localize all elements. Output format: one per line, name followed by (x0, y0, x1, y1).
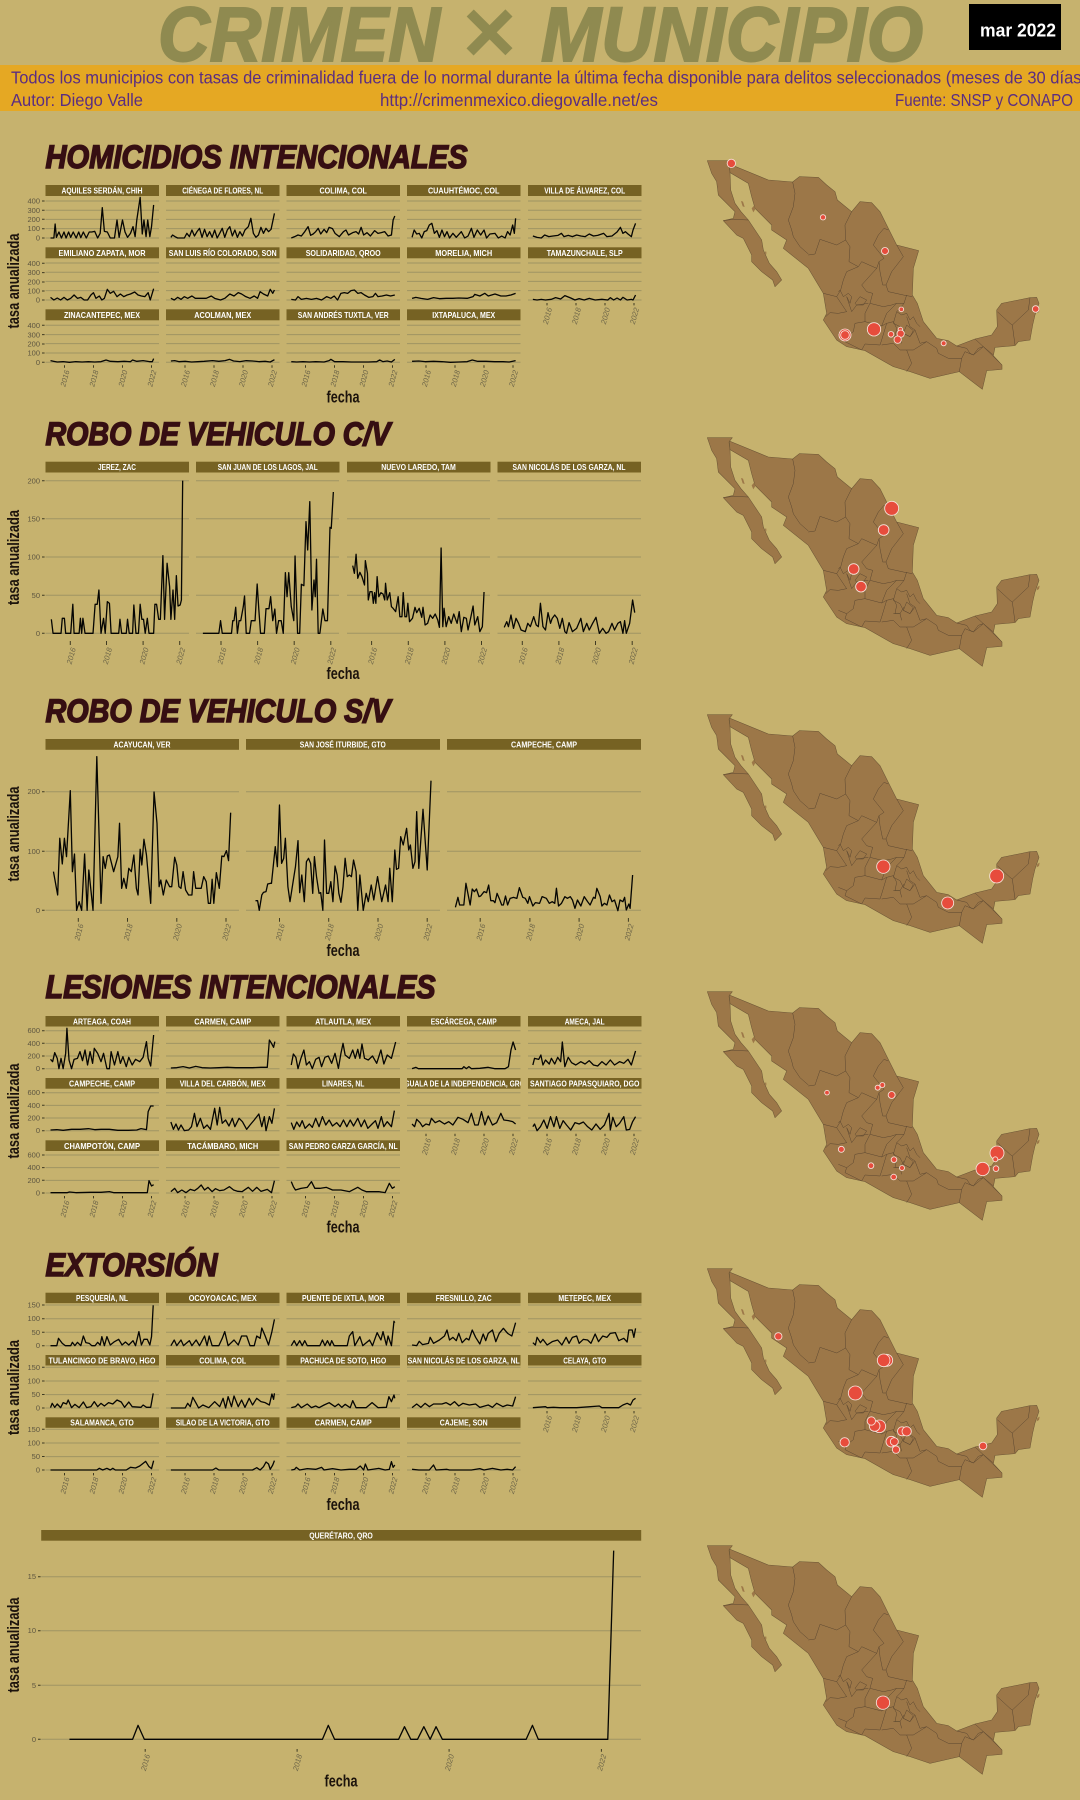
panel: San José Iturbide: SAN JOSÉ ITURBIDE, GTO (300, 739, 386, 749)
panel: San Andrés Tuxtla: 2022 (386, 368, 400, 389)
panel: San Andrés Tuxtla: 2020 (357, 368, 371, 389)
panel: Champotón: CHAMPOTÓN, CAMP (64, 1140, 140, 1151)
panel: Iguala de la Independencia (403, 1078, 525, 1157)
panel: Linares: LINARES, NL (322, 1080, 364, 1088)
y axis labels: 0 (32, 1735, 36, 1744)
panel: Iguala de la Independencia: 2022 (507, 1137, 520, 1157)
panel: Campeche: 2016 (474, 922, 488, 942)
panel: Silao de la Victoria (166, 1417, 280, 1496)
y axis labels: 200 (27, 1114, 40, 1122)
y axis labels: 50 (32, 591, 40, 600)
panel: Salamanca: 2022 (145, 1476, 159, 1496)
date badge (969, 4, 1061, 50)
heading: LESIONES INTENCIONALES (46, 969, 436, 1005)
panel: Iguala de la Independencia: 2016 (420, 1137, 433, 1157)
heading: ROBO DE VEHICULO C/V (46, 416, 393, 452)
panel: Santiago Papasquiaro: 2016 (541, 1137, 554, 1157)
panel: San Nicolás de los Garza (407, 1355, 520, 1408)
panel: Zinacantepec: 2020 (116, 368, 130, 389)
y axis labels: 400 (27, 1163, 40, 1172)
x axis: 2016 (139, 1753, 152, 1773)
panel: Silao de la Victoria: SILAO DE LA VICTORIA, GTO (176, 1419, 270, 1428)
panel: Celaya (528, 1355, 642, 1434)
panel: Champotón: 2022 (145, 1199, 159, 1219)
panel: Santiago Papasquiaro (528, 1078, 642, 1157)
panel: Fresnillo: FRESNILLO, ZAC (436, 1294, 492, 1303)
y axis labels: 600 (27, 1150, 40, 1160)
panel: Colima: COLIMA, COL (199, 1356, 246, 1365)
panel: Tacámbaro: 2022 (266, 1199, 279, 1219)
panel: Salamanca (46, 1417, 159, 1496)
y axis title: tasa anualizada (5, 1597, 23, 1692)
panel: Salamanca: 2018 (87, 1476, 101, 1496)
panel: Acayucan: ACAYUCAN, VER (114, 740, 171, 749)
y axis labels: 50 (32, 1390, 40, 1399)
panel: Morelia: MORELIA, MICH (435, 249, 492, 258)
panel: Santiago Papasquiaro: 2018 (570, 1137, 583, 1157)
y axis labels: 300 (27, 268, 40, 277)
y axis labels: 600 (27, 1088, 40, 1097)
panel: Acolman: 2022 (266, 368, 279, 389)
panel: Tamazunchale: 2022 (628, 306, 641, 326)
map: robo s/v (707, 715, 1040, 943)
y axis labels: 400 (27, 196, 40, 206)
panel: Celaya: 2018 (570, 1414, 583, 1434)
panel: San Luis Río Colorado: SAN LUIS RÍO COLORADO, SON (169, 248, 277, 258)
y axis labels (27, 787, 45, 915)
panel: San José Iturbide: 2020 (372, 922, 385, 942)
panel: Linares (286, 1078, 400, 1131)
panel: Celaya: CELAYA, GTO (563, 1356, 607, 1365)
panel: San Nicolás de los Garza: SAN NICOLÁS DE LOS GARZA, NL (512, 462, 626, 472)
panel: Tulancingo de Bravo (46, 1355, 159, 1408)
panel: Cajeme: 2020 (478, 1476, 491, 1496)
panel: Jerez: 2020 (137, 646, 151, 666)
panel: Zinacantepec: ZINACANTEPEC, MEX (64, 311, 140, 320)
panel: Carmen: CARMEN, CAMP (315, 1419, 372, 1428)
panel: San Nicolás de los Garza: SAN NICOLÁS DE LOS GARZA, NL (408, 1355, 520, 1365)
panel: Campeche: 2020 (573, 922, 587, 942)
panel: Champotón: 2020 (116, 1199, 130, 1219)
panel: Ixtapaluca: IXTAPALUCA, MEX (432, 311, 496, 320)
y axis labels: 0 (36, 629, 40, 638)
panel: Acayucan: 2018 (121, 922, 135, 942)
panel: Ciénega de Flores (166, 185, 280, 238)
panel: Puente de Ixtla: PUENTE DE IXTLA, MOR (302, 1294, 385, 1303)
heading: EXTORSIÓN (46, 1247, 218, 1283)
panel: Zinacantepec: 2018 (87, 368, 101, 389)
y axis labels: 100 (27, 286, 40, 295)
panel: Cajeme: 2022 (507, 1476, 520, 1496)
panel: San José Iturbide (246, 739, 440, 942)
panel: Tacámbaro: 2020 (237, 1199, 250, 1219)
y axis labels: 100 (27, 1314, 40, 1323)
y axis labels: 100 (27, 847, 40, 856)
strip label (41, 1530, 641, 1541)
panel: Acayucan: 2022 (220, 922, 233, 942)
panel: Nuevo Laredo (347, 462, 490, 666)
panel: San Andrés Tuxtla: 2018 (328, 368, 342, 389)
y axis labels: 200 (27, 340, 40, 349)
panel: Ocoyoacac (166, 1293, 280, 1346)
panel: Villa de Álvarez: VILLA DE ÁLVAREZ, COL (544, 186, 625, 196)
panel: San Nicolás de los Garza: 2016 (517, 646, 530, 666)
panel: Nuevo Laredo: 2016 (366, 646, 379, 666)
panel: Tacámbaro: TACÁMBARO, MICH (187, 1141, 258, 1151)
x axis title: fecha (326, 388, 360, 406)
panel: Champotón: 2016 (58, 1199, 72, 1219)
y axis title: tasa anualizada (5, 1063, 23, 1158)
panel: San Juan de los Lagos (196, 462, 340, 666)
panel: Emiliano Zapata (46, 247, 159, 300)
y axis labels: 400 (27, 259, 40, 268)
y axis title: tasa anualizada (5, 786, 23, 882)
panel: Iguala de la Independencia: IGUALA DE LA INDEPENDENCIA, GRO (403, 1080, 525, 1088)
y axis labels: 10 (28, 1626, 36, 1635)
panel: Tamazunchale (528, 247, 642, 326)
panel: Escárcega: ESCÁRCEGA, CAMP (431, 1016, 497, 1026)
y axis labels (27, 476, 45, 638)
panel: San Nicolás de los Garza: 2022 (626, 646, 640, 666)
author: Autor: Diego Valle (11, 90, 143, 110)
panel: Salamanca: 2016 (58, 1476, 72, 1496)
panel: Tacámbaro (166, 1140, 280, 1219)
panel: Celaya: 2022 (628, 1414, 641, 1434)
y axis labels: 400 (27, 1039, 40, 1048)
x axis (139, 1749, 609, 1773)
section: lesiones intencionales (5, 969, 642, 1236)
panel: San Juan de los Lagos: SAN JUAN DE LOS LAGOS, JAL (218, 463, 318, 472)
panel: San Pedro Garza García: SAN PEDRO GARZA GARCÍA, NL (289, 1141, 398, 1151)
panel: Villa del Carbón (166, 1078, 280, 1131)
y axis labels: 200 (27, 787, 40, 796)
y axis labels: 5 (32, 1681, 36, 1690)
panel: Zinacantepec: 2016 (58, 368, 72, 389)
y axis labels: 150 (27, 514, 40, 523)
panel: Ixtapaluca: 2018 (449, 368, 462, 389)
panel: Metepec (528, 1293, 642, 1346)
panel: San Andrés Tuxtla: SAN ANDRÉS TUXTLA, VER (298, 310, 389, 320)
panel: Iguala de la Independencia: 2018 (449, 1137, 462, 1157)
title (158, 0, 923, 83)
y axis labels (27, 1026, 45, 1198)
panel: Tamazunchale: 2018 (570, 306, 583, 326)
panel: Jerez: JEREZ, ZAC (98, 463, 136, 472)
panel: San Pedro Garza García: 2020 (357, 1199, 371, 1219)
strip label: QUERÉTARO, QRO (309, 1530, 373, 1540)
panel: Pesquería: PESQUERÍA, NL (76, 1293, 128, 1303)
panel: San Pedro Garza García (286, 1140, 400, 1219)
y axis labels: 0 (36, 296, 40, 304)
y axis labels: 0 (36, 1466, 40, 1474)
panel: Cuauhtémoc (407, 185, 520, 238)
panel: Ixtapaluca: 2020 (478, 368, 491, 389)
panel: Campeche: CAMPECHE, CAMP (69, 1080, 135, 1088)
section: querétaro chart (5, 1530, 641, 1790)
panel: Pesquería (46, 1293, 159, 1346)
panel: Celaya: 2016 (541, 1414, 554, 1434)
grid lines (46, 481, 641, 633)
panel: Celaya: 2020 (599, 1414, 612, 1434)
panel: San Nicolás de los Garza: 2018 (553, 646, 567, 666)
panel: Zinacantepec (46, 309, 159, 389)
panel: Colima (286, 185, 400, 238)
panel: Cuauhtémoc: CUAUHTÉMOC, COL (428, 186, 499, 196)
panel: San José Iturbide: 2018 (323, 922, 336, 942)
panel: Solidaridad (286, 247, 400, 300)
panel: Jerez: 2022 (174, 646, 187, 666)
panel: Carmen (166, 1016, 280, 1069)
y axis labels: 0 (36, 906, 40, 915)
panel: Ixtapaluca: 2022 (507, 368, 520, 389)
panel: San Juan de los Lagos: 2022 (325, 646, 339, 666)
map: lesiones (707, 992, 1040, 1220)
panel: San Pedro Garza García: 2016 (299, 1199, 313, 1219)
y axis labels: 400 (27, 321, 40, 330)
panel: San José Iturbide: 2016 (273, 922, 287, 942)
panel: Pachuca de Soto: PACHUCA DE SOTO, HGO (300, 1356, 387, 1365)
panel: Cajeme: 2018 (449, 1476, 462, 1496)
y axis labels: 100 (27, 553, 40, 562)
panel: Morelia (407, 247, 520, 300)
panel: Emiliano Zapata: EMILIANO ZAPATA, MOR (58, 249, 146, 258)
panel: San Juan de los Lagos: 2016 (215, 646, 229, 666)
map: robo c/v (707, 438, 1040, 666)
y axis labels (27, 1300, 45, 1474)
panel: Campeche: 2022 (622, 922, 636, 942)
panel: Acolman: ACOLMAN, MEX (194, 311, 252, 320)
panel: Puente de Ixtla (286, 1293, 400, 1346)
y axis title: tasa anualizada (5, 1339, 23, 1435)
panel: Champotón: 2018 (87, 1199, 101, 1219)
panel: San Nicolás de los Garza: 2020 (590, 646, 603, 666)
panel: Santiago Papasquiaro: SANTIAGO PAPASQUIARO, DGO (530, 1080, 640, 1088)
panel: Tamazunchale: 2020 (599, 306, 612, 326)
panel: San Andrés Tuxtla (286, 309, 400, 389)
panel: Champotón (46, 1140, 159, 1219)
panel: Acolman (166, 309, 280, 389)
panel: Carmen: 2016 (299, 1476, 313, 1496)
panel: Carmen (286, 1417, 400, 1496)
x axis title: fecha (326, 665, 360, 683)
panel: Escárcega (407, 1016, 520, 1069)
panel: Nuevo Laredo: NUEVO LAREDO, TAM (381, 463, 456, 472)
panel: Campeche: 2018 (524, 922, 537, 942)
panel: Tamazunchale: TAMAZUNCHALE, SLP (547, 249, 623, 258)
subtitle band (0, 65, 1080, 111)
panel: Acayucan: 2016 (72, 922, 86, 942)
x axis title: fecha (324, 1772, 358, 1790)
panel: Ameca: AMECA, JAL (565, 1017, 605, 1026)
panel: Metepec: METEPEC, MEX (558, 1294, 611, 1303)
panel: San Nicolás de los Garza (498, 462, 641, 666)
panel: Aquiles Serdán (46, 185, 159, 238)
grid lines (46, 792, 641, 910)
panel: Ameca (528, 1016, 642, 1069)
panel: Carmen: 2020 (357, 1476, 371, 1496)
panel: Cajeme: 2016 (420, 1476, 433, 1496)
panel: Zinacantepec: 2022 (145, 368, 159, 389)
panel: San José Iturbide: 2022 (421, 922, 435, 942)
panel: Campeche (447, 739, 641, 942)
panel: Carmen: 2018 (328, 1476, 342, 1496)
section: robo de vehiculo c/v (5, 416, 641, 683)
panel: Silao de la Victoria: 2016 (179, 1476, 192, 1496)
panel: Tamazunchale: 2016 (541, 306, 554, 326)
panel: Solidaridad: SOLIDARIDAD, QROO (306, 249, 381, 258)
x axis: 2018 (291, 1753, 304, 1773)
panel: Ixtapaluca (407, 309, 520, 389)
panel: Silao de la Victoria: 2020 (237, 1476, 250, 1496)
y axis labels: 100 (27, 1438, 40, 1448)
section: extorsión (5, 1247, 642, 1514)
y axis labels: 100 (27, 349, 40, 358)
panel: Acolman: 2016 (179, 368, 192, 389)
map: querétaro (707, 1546, 1040, 1774)
y axis labels (27, 196, 45, 367)
y axis labels: 0 (36, 1064, 40, 1073)
y axis labels: 0 (36, 1188, 40, 1198)
panel: Villa del Carbón: VILLA DEL CARBÓN, MEX (180, 1078, 266, 1088)
panel: Tacámbaro: 2018 (208, 1199, 221, 1219)
y axis labels: 200 (27, 1176, 40, 1185)
panel: San Pedro Garza García: 2022 (386, 1199, 400, 1219)
panel: Acayucan (46, 739, 239, 942)
panel: San Juan de los Lagos: 2020 (288, 646, 302, 666)
panel: Nuevo Laredo: 2018 (403, 646, 416, 666)
heading: ROBO DE VEHICULO S/V (46, 693, 393, 729)
panel: Iguala de la Independencia: 2020 (478, 1137, 491, 1157)
panel: Santiago Papasquiaro: 2020 (599, 1137, 612, 1157)
panel: Campeche: CAMPECHE, CAMP (511, 740, 577, 749)
y axis labels: 300 (27, 330, 40, 339)
y axis labels: 200 (27, 215, 40, 224)
y axis labels: 100 (27, 1376, 40, 1386)
panel: Acayucan: 2020 (171, 922, 184, 942)
panel: Acolman: 2018 (208, 368, 221, 389)
y axis labels: 0 (36, 1126, 40, 1135)
panel: Silao de la Victoria: 2018 (208, 1476, 221, 1496)
x axis title: fecha (326, 1218, 360, 1236)
panel: Salamanca: SALAMANCA, GTO (70, 1419, 134, 1428)
panel: Villa de Álvarez (528, 185, 642, 238)
panel: San Pedro Garza García: 2018 (328, 1199, 342, 1219)
panel: Ixtapaluca: 2016 (420, 368, 433, 389)
y axis labels: 200 (27, 476, 40, 485)
y axis labels: 200 (27, 1052, 40, 1060)
y axis labels: 0 (36, 358, 40, 367)
x axis title: fecha (326, 1496, 360, 1514)
panel: Carmen: CARMEN, CAMP (194, 1017, 252, 1026)
panel: Cajeme: CAJEME, SON (440, 1419, 488, 1428)
panel: Atlautla: ATLAUTLA, MEX (315, 1017, 372, 1026)
y axis labels: 0 (36, 1341, 40, 1350)
x axis title: fecha (326, 942, 360, 960)
y axis labels: 200 (27, 277, 40, 286)
panel: Cajeme (407, 1417, 520, 1496)
panel: Campeche (46, 1078, 159, 1131)
y axis labels (28, 1572, 41, 1744)
panel: Aquiles Serdán: AQUILES SERDÁN, CHIH (62, 186, 143, 196)
panel: Ciénega de Flores: CIÉNEGA DE FLORES, NL (182, 186, 263, 196)
panel: Colima: COLIMA, COL (319, 186, 367, 196)
panel: Arteaga (46, 1016, 159, 1069)
panel: Salamanca: 2020 (116, 1476, 130, 1496)
y axis labels: 50 (32, 1328, 40, 1337)
x axis: 2020 (443, 1753, 456, 1773)
panel: Acolman: 2020 (237, 368, 250, 389)
y axis labels: 600 (27, 1026, 40, 1035)
section: robo de vehiculo s/v (5, 693, 641, 960)
panel: San Andrés Tuxtla: 2016 (299, 368, 313, 389)
panel: Pachuca de Soto (286, 1355, 400, 1408)
map: extorsión (707, 1269, 1040, 1497)
panel: Nuevo Laredo: 2020 (439, 646, 453, 666)
date badge: mar 2022 (980, 20, 1056, 40)
panel: Nuevo Laredo: 2022 (476, 646, 489, 666)
grid lines (41, 1577, 641, 1739)
section: homicidios intencionales (5, 139, 642, 406)
panel: Silao de la Victoria: 2022 (266, 1476, 279, 1496)
panel: Santiago Papasquiaro: 2022 (628, 1137, 641, 1157)
panel: San Luis Río Colorado (166, 247, 280, 300)
panel: Ocoyoacac: OCOYOACAC, MEX (189, 1294, 257, 1303)
y axis title: tasa anualizada (5, 233, 23, 328)
panel: Jerez (46, 462, 189, 666)
y axis labels: 300 (27, 206, 40, 215)
y axis labels: 150 (27, 1425, 40, 1434)
y axis labels: 0 (36, 1404, 40, 1412)
line chart (69, 1551, 614, 1739)
heading: HOMICIDIOS INTENCIONALES (46, 139, 468, 175)
panel: Fresnillo (407, 1293, 520, 1346)
panel: Carmen: 2022 (386, 1476, 400, 1496)
panel: Tacámbaro: 2016 (179, 1199, 192, 1219)
y axis labels: 50 (32, 1452, 40, 1461)
y axis labels: 0 (36, 234, 40, 242)
panel: Atlautla (286, 1016, 400, 1069)
panel: Tulancingo de Bravo: TULANCINGO DE BRAVO, HGO (48, 1356, 156, 1365)
y axis labels: 150 (27, 1300, 40, 1310)
y axis title: tasa anualizada (5, 509, 23, 605)
y axis labels: 400 (27, 1101, 40, 1110)
y axis labels: 100 (27, 224, 40, 233)
x axis: 2022 (595, 1753, 609, 1773)
panel: Arteaga: ARTEAGA, COAH (73, 1017, 131, 1026)
map: homicidios (707, 159, 1040, 389)
panel: Jerez: 2018 (101, 646, 114, 666)
y axis labels: 150 (27, 1363, 40, 1372)
url: http://crimenmexico.diegovalle.net/es (380, 90, 658, 110)
panel: Jerez: 2016 (65, 646, 78, 666)
panel: Colima (166, 1355, 280, 1408)
panel: San Juan de los Lagos: 2018 (252, 646, 265, 666)
y axis labels: 15 (28, 1572, 36, 1581)
